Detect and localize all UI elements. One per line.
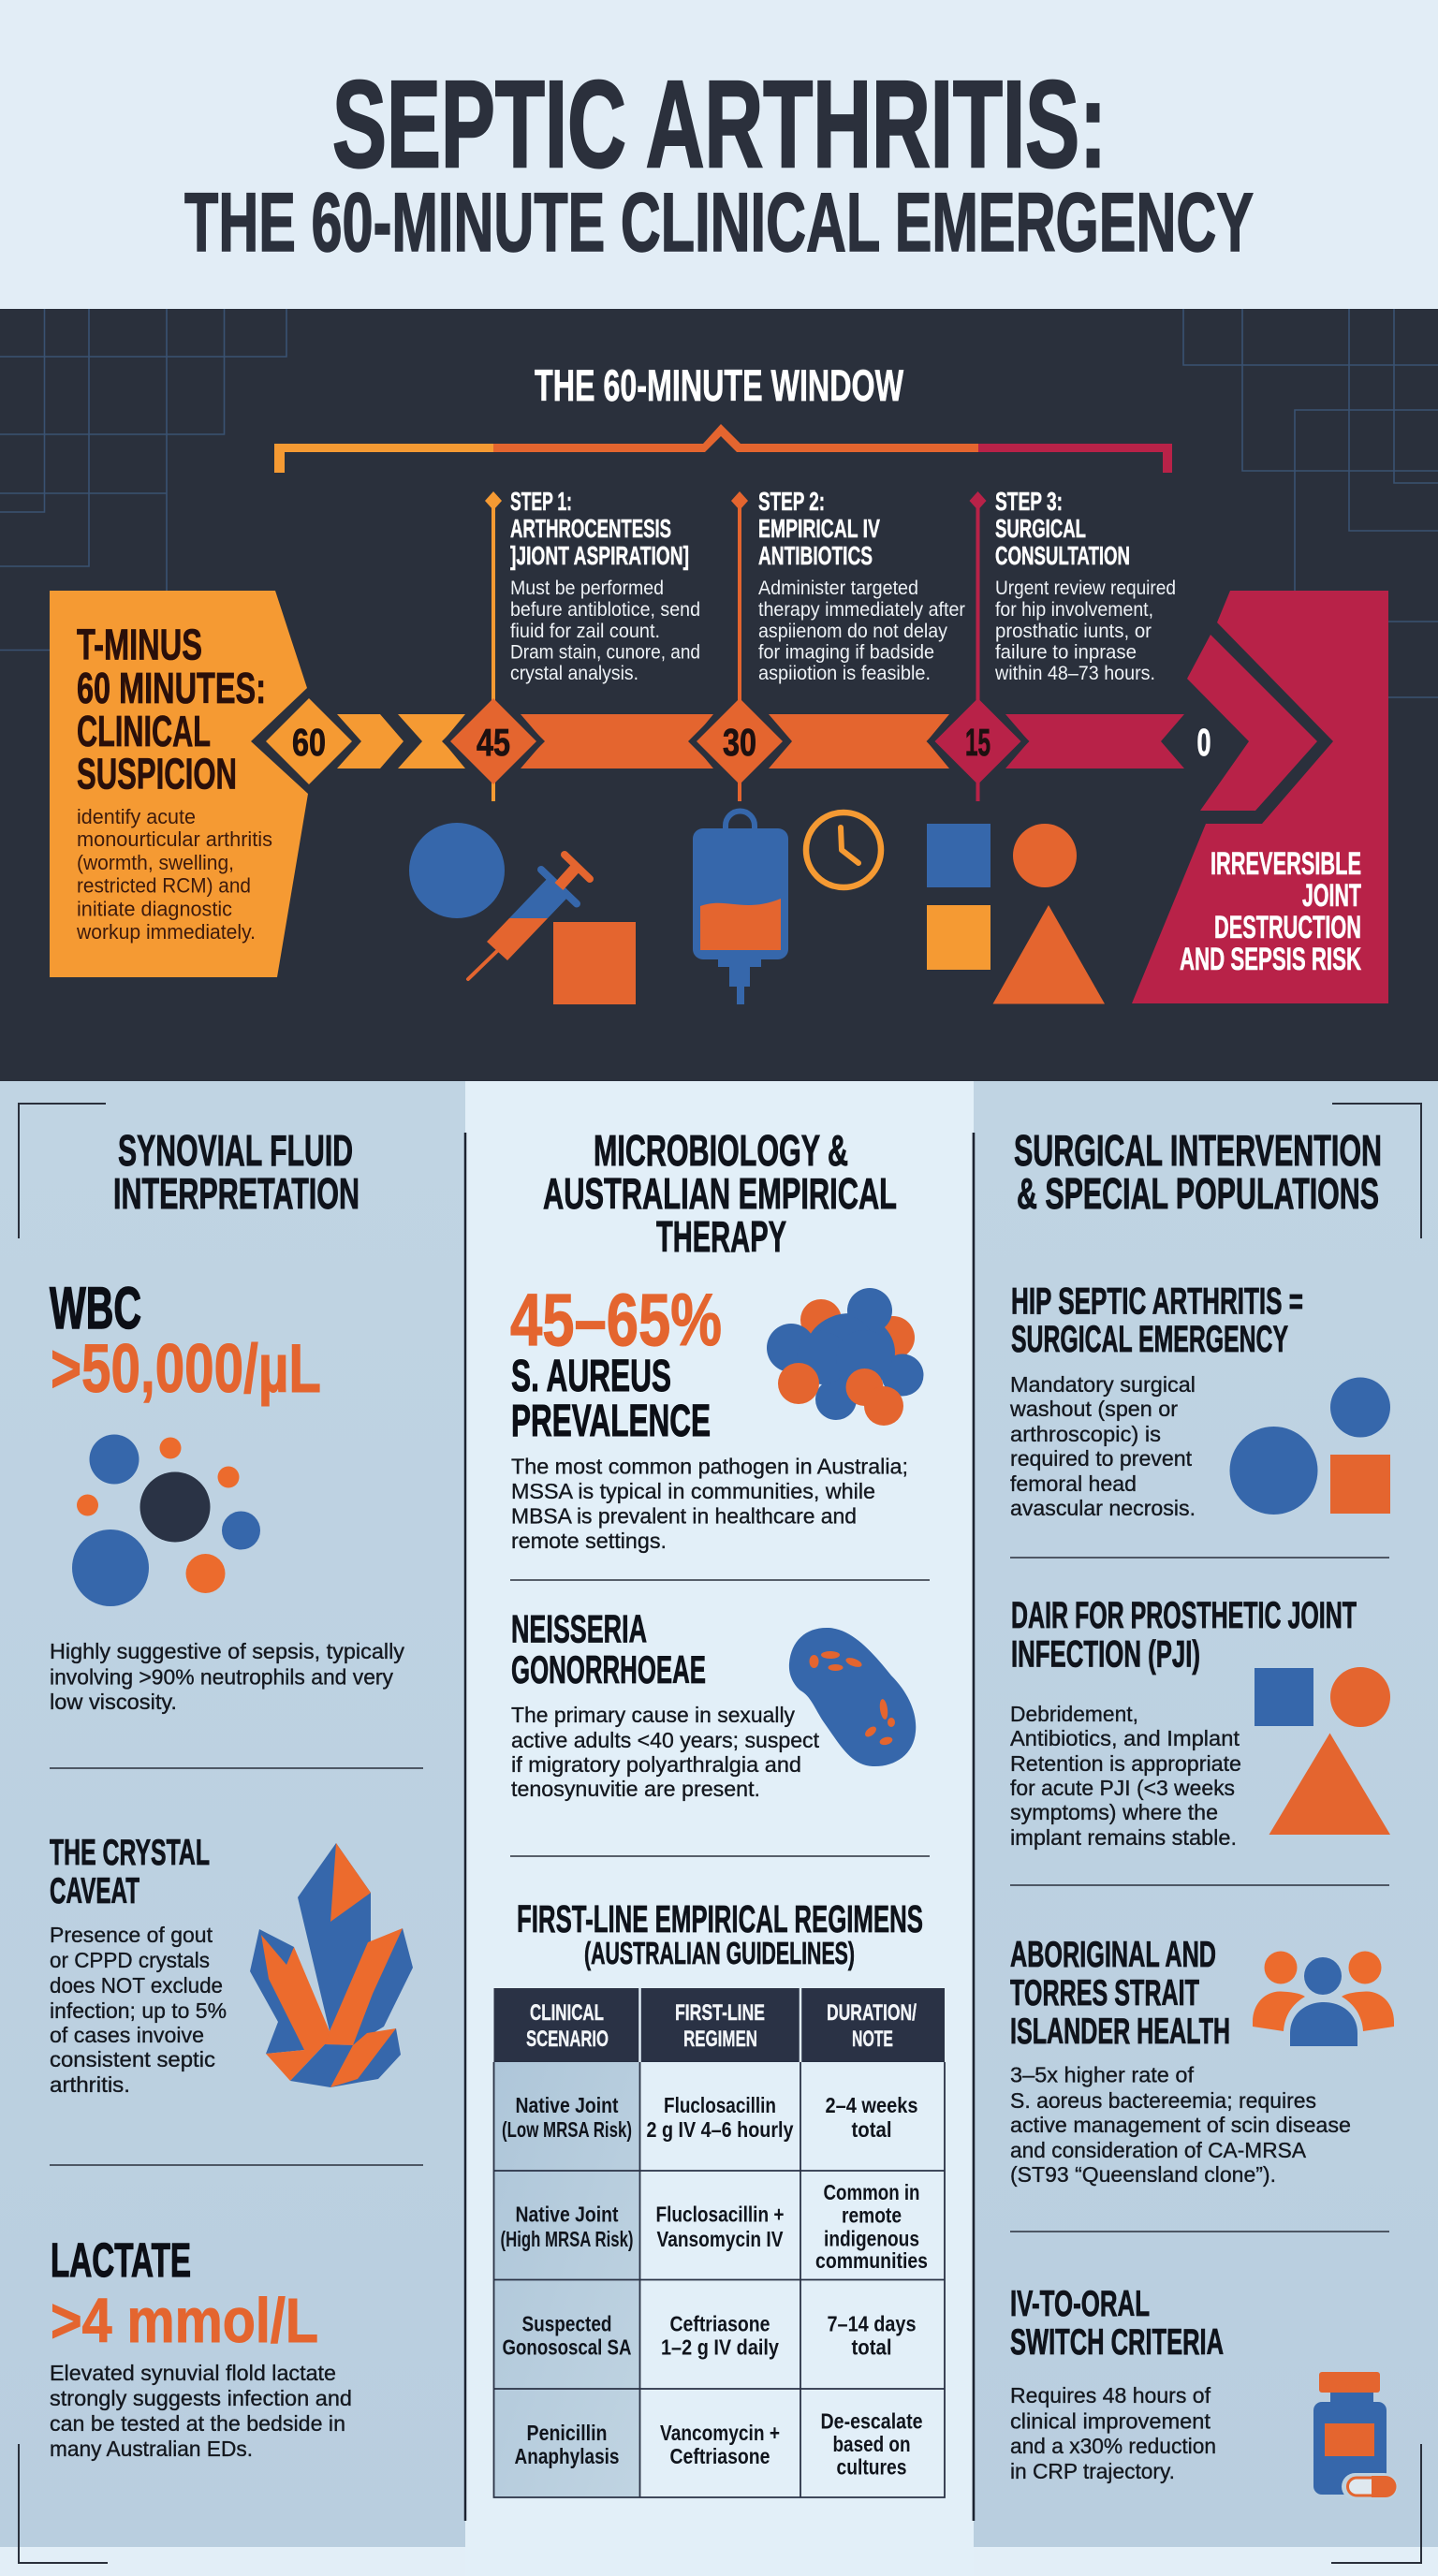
- block heading: Aboriginal and Torres Strait Islander health: TORRES STRAIT: [1010, 1973, 1199, 2013]
- step 3 marker 15 with stem: [927, 491, 1030, 801]
- table row: suspected gonococcal: Suspected: [522, 2312, 612, 2336]
- text: lactate description: many Australian EDs.: [50, 2437, 253, 2461]
- stat: lactate: [51, 2233, 318, 2356]
- table header row: DURATION/: [827, 2000, 917, 2026]
- stat: S. aureus prevalence: [510, 1278, 722, 1446]
- table header row: [526, 2000, 917, 2052]
- table row: suspected gonococcal: [502, 2312, 916, 2359]
- table row: suspected gonococcal: Ceftriasone: [670, 2312, 770, 2336]
- table row: native joint high MRSA risk: (High MRSA Risk): [500, 2227, 633, 2251]
- table row: penicillin anaphylaxis: Penicillin: [526, 2421, 607, 2445]
- text: Aboriginal health description: (ST93 “Queensland clone”).: [1010, 2162, 1276, 2187]
- text: Aboriginal health description: S. aoreus bactereemia; requires: [1010, 2088, 1316, 2113]
- table row: suspected gonococcal: total: [852, 2334, 891, 2359]
- step 3 text: SURGICAL: [995, 514, 1086, 543]
- block heading: first-line empirical regimens: (AUSTRALIAN GUIDELINES): [584, 1936, 855, 1970]
- end panel: irreversible joint destruction: [1132, 591, 1388, 1003]
- text: Aboriginal health description: active management of scin disease: [1010, 2113, 1351, 2137]
- table row: native joint high MRSA risk: indigenous: [824, 2226, 919, 2250]
- text: crystal caveat: consistent septic: [50, 2047, 215, 2071]
- column heading: [1014, 1126, 1382, 1218]
- column heading: THERAPY: [656, 1212, 786, 1261]
- table row: suspected gonococcal: 1–2 g IV daily: [661, 2334, 779, 2359]
- table header row: CLINICAL: [530, 2000, 604, 2026]
- text: DAIR description: Retention is appropriate: [1010, 1751, 1241, 1776]
- end panel: irreversible joint destruction: JOINT: [1302, 878, 1361, 914]
- text: gonorrhoeae description: tenosynuvitie are present.: [511, 1777, 760, 1801]
- step 1 marker 45 with stem: [442, 491, 545, 801]
- panel: synovial fluid interpretation: [0, 1081, 465, 2563]
- step 2 text: therapy immediately after: [758, 599, 965, 621]
- text: IV-to-oral description: Requires 48 hours of: [1010, 2383, 1211, 2408]
- stat: WBC: [50, 1276, 321, 1407]
- icon: people: [1253, 1951, 1394, 2046]
- step 1 text: [510, 487, 700, 684]
- start panel: T-minus 60 minutes: CLINICAL: [77, 707, 211, 755]
- step 1 text: Dram stain, cunore, and: [510, 642, 700, 663]
- start panel: T-minus 60 minutes: monourticular arthritis: [77, 827, 272, 851]
- step 1 text: crystal analysis.: [510, 663, 638, 684]
- column heading: SYNOVIAL FLUID: [118, 1126, 353, 1175]
- table row: native joint high MRSA risk: Common in: [824, 2180, 919, 2204]
- table row: native joint low MRSA risk: 2 g IV 4–6 hourly: [646, 2117, 794, 2142]
- table row: penicillin anaphylaxis: based on: [833, 2432, 910, 2456]
- block heading: the crystal caveat: CAVEAT: [50, 1871, 139, 1911]
- step 2 text: for imaging if badside: [758, 642, 934, 663]
- step 1 text: ]JIONT ASPIRATION]: [510, 541, 689, 570]
- column heading: [543, 1126, 897, 1261]
- stat: S. aureus prevalence: PREVALENCE: [511, 1397, 711, 1446]
- table row: penicillin anaphylaxis: Vancomycin +: [660, 2421, 780, 2445]
- icon: staphylococcus cluster: [767, 1288, 923, 1426]
- text: IV-to-oral description: clinical improvement: [1010, 2409, 1211, 2434]
- block heading: the crystal caveat: [50, 1833, 210, 1911]
- text: hip description: avascular necrosis.: [1010, 1496, 1196, 1520]
- text: DAIR description: Antibiotics, and Implant: [1010, 1726, 1240, 1750]
- text: crystal caveat: does NOT exclude: [50, 1973, 223, 1998]
- step 3 text: Urgent review required: [995, 578, 1176, 599]
- block heading: Neisseria gonorrhoeae: NEISSERIA: [511, 1606, 647, 1651]
- start panel: T-minus 60 minutes: (wormth, swelling,: [77, 851, 234, 874]
- step 2 text: aspiienom do not delay: [758, 621, 947, 642]
- table row: penicillin anaphylaxis: Ceftriasone: [670, 2444, 770, 2468]
- text: hip description: arthroscopic) is: [1010, 1422, 1161, 1446]
- table row: native joint high MRSA risk: [500, 2180, 928, 2273]
- table row: native joint high MRSA risk: Fluclosacillin +: [655, 2202, 785, 2226]
- stat: WBC: >50,000/µL: [51, 1329, 321, 1407]
- text: DAIR description: symptoms) where the: [1010, 1800, 1218, 1824]
- text: IV-to-oral description: [1010, 2383, 1216, 2483]
- text: hip description: Mandatory surgical: [1010, 1372, 1196, 1397]
- step 1 text: fiuid for zail count.: [510, 621, 660, 642]
- block heading: Aboriginal and Torres Strait Islander health: ISLANDER HEALTH: [1010, 2012, 1230, 2052]
- table row: native joint low MRSA risk: [502, 2093, 917, 2142]
- table row: native joint low MRSA risk: Fluclosacillin: [664, 2093, 776, 2117]
- table row: native joint high MRSA risk: Native Joint: [515, 2202, 619, 2226]
- table row: native joint low MRSA risk: total: [852, 2117, 891, 2142]
- text: crystal caveat: arthritis.: [50, 2072, 130, 2097]
- step 3 text: for hip involvement,: [995, 599, 1153, 621]
- step 2 text: EMPIRICAL IV: [758, 514, 880, 543]
- start panel: T-minus 60 minutes: workup immediately.: [76, 920, 256, 944]
- text: crystal caveat: of cases invoive: [50, 2023, 204, 2047]
- panel: surgical intervention and special populations: [974, 1081, 1438, 2563]
- table row: penicillin anaphylaxis: [515, 2409, 923, 2479]
- column heading: [113, 1126, 360, 1218]
- block heading: Aboriginal and Torres Strait Islander health: [1010, 1935, 1230, 2052]
- text: DAIR description: Debridement,: [1010, 1702, 1138, 1726]
- step 3 text: within 48–73 hours.: [994, 663, 1155, 684]
- step 1 text: ARTHROCENTESIS: [510, 514, 671, 543]
- step 2 marker 30 with stem: [688, 491, 791, 801]
- step 2 text: aspiiotion is feasible.: [758, 663, 931, 684]
- text: WBC description: involving >90% neutrophils and very: [50, 1664, 393, 1689]
- table header row: SCENARIO: [526, 2027, 609, 2052]
- table header row: REGIMEN: [683, 2027, 757, 2052]
- icon: orange square: [553, 922, 636, 1004]
- icon: blue circle: [409, 823, 505, 918]
- column heading: AUSTRALIAN EMPIRICAL: [543, 1169, 897, 1218]
- panel: microbiology and empirical therapy: [465, 1081, 974, 2576]
- text: hip description: required to prevent: [1010, 1446, 1193, 1471]
- text: lactate description: strongly suggests infection and: [50, 2386, 352, 2410]
- panel: 60-minute window timeline: [0, 309, 1438, 1081]
- block heading: the crystal caveat: THE CRYSTAL: [50, 1833, 210, 1873]
- column heading: MICROBIOLOGY &: [594, 1126, 848, 1175]
- block heading: first-line empirical regimens: FIRST-LINE EMPIRICAL REGIMENS: [517, 1897, 923, 1940]
- start panel: T-minus 60 minutes: [50, 591, 308, 977]
- text: lactate description: [50, 2361, 352, 2461]
- table header row: NOTE: [852, 2027, 893, 2052]
- text: DAIR description: [1010, 1702, 1241, 1850]
- text: S. aureus description: remote settings.: [511, 1529, 667, 1553]
- step 1 text: Must be performed: [510, 578, 664, 599]
- icon: DAIR shapes: [1255, 1667, 1390, 1835]
- table row: penicillin anaphylaxis: De-escalate: [820, 2409, 923, 2434]
- block heading: IV-to-oral switch criteria: [1010, 2284, 1224, 2363]
- block heading: first-line empirical regimens: [517, 1897, 923, 1970]
- text: hip description: washout (spen or: [1009, 1397, 1178, 1421]
- start panel: T-minus 60 minutes: 60 MINUTES:: [77, 664, 266, 712]
- stat: lactate: LACTATE: [51, 2233, 191, 2287]
- end panel: irreversible joint destruction: DESTRUCTION: [1214, 910, 1361, 945]
- table row: suspected gonococcal: 7–14 days: [828, 2312, 916, 2336]
- text: DAIR description: implant remains stable.: [1010, 1825, 1237, 1850]
- timeline marker 60: 60: [292, 721, 326, 764]
- table row: native joint high MRSA risk: Vansomycin IV: [657, 2227, 784, 2251]
- start panel: T-minus 60 minutes: SUSPICION: [77, 749, 237, 798]
- column heading: INTERPRETATION: [113, 1169, 360, 1218]
- block heading: DAIR: [1011, 1595, 1357, 1676]
- table row: native joint low MRSA risk: 2–4 weeks: [826, 2093, 917, 2117]
- text: crystal caveat: Presence of gout: [50, 1923, 213, 1947]
- step 3 marker 15 with stem: 15: [965, 721, 990, 764]
- table row: native joint high MRSA risk: communities: [815, 2248, 928, 2273]
- icon: IV bag: [693, 811, 788, 1004]
- block heading: IV-to-oral switch criteria: SWITCH CRITERIA: [1010, 2322, 1224, 2363]
- title block: [0, 0, 1438, 309]
- icon: cell cluster: [72, 1434, 260, 1606]
- table: first-line regimens: [494, 1988, 945, 2497]
- icon: hip shapes: [1230, 1378, 1390, 1515]
- step 1 text: STEP 1:: [510, 487, 572, 516]
- start panel: T-minus 60 minutes: T-MINUS: [77, 620, 202, 668]
- table row: native joint low MRSA risk: (Low MRSA Risk): [502, 2117, 632, 2142]
- icon: syringe: [468, 855, 590, 979]
- text: WBC description: [50, 1639, 405, 1714]
- text: crystal caveat: [50, 1923, 227, 2097]
- step 2 text: STEP 2:: [758, 487, 825, 516]
- table row: penicillin anaphylaxis: Anaphylasis: [515, 2444, 620, 2468]
- text: hip description: femoral head: [1010, 1471, 1137, 1496]
- text: gonorrhoeae description: if migratory polyarthralgia and: [511, 1752, 801, 1777]
- stat: WBC: WBC: [50, 1276, 141, 1341]
- text: hip description: [1009, 1372, 1196, 1520]
- step 3 text: CONSULTATION: [995, 541, 1130, 570]
- text: S. aureus description: The most common pathogen in Australia;: [511, 1455, 908, 1479]
- text: DAIR description: for acute PJI (<3 weeks: [1010, 1776, 1235, 1800]
- block heading: hip septic arthritis: [1011, 1281, 1303, 1360]
- text: lactate description: Elevated synuvial flold lactate: [50, 2361, 336, 2385]
- table header row: FIRST-LINE: [675, 2000, 765, 2026]
- block heading: DAIR: INFECTION (PJI): [1011, 1634, 1200, 1676]
- table row: native joint low MRSA risk: Native Joint: [515, 2093, 619, 2117]
- step 2 text: [758, 487, 965, 684]
- text: S. aureus description: MBSA is prevalent in healthcare and: [511, 1503, 857, 1528]
- text: WBC description: low viscosity.: [50, 1690, 177, 1714]
- block heading: Neisseria gonorrhoeae: GONORRHOEAE: [511, 1647, 706, 1691]
- step 1 marker 45 with stem: 45: [477, 721, 510, 764]
- timeline band segments: [337, 714, 1184, 768]
- step 3 text: prosthatic iunts, or: [995, 621, 1152, 642]
- stat: lactate: >4 mmol/L: [51, 2286, 318, 2356]
- text: WBC description: Highly suggestive of sepsis, typically: [50, 1639, 405, 1663]
- text: Aboriginal health description: [1010, 2063, 1351, 2187]
- block heading: Aboriginal and Torres Strait Islander health: ABORIGINAL AND: [1010, 1935, 1216, 1975]
- stat: S. aureus prevalence: 45–65%: [510, 1278, 722, 1361]
- step 1 text: befure antiblotice, send: [510, 599, 700, 621]
- text: gonorrhoeae description: [511, 1703, 820, 1801]
- icon: crystal: [250, 1843, 413, 2087]
- step 3 text: failure to inprase: [995, 642, 1137, 663]
- icon: diplococci cell: [789, 1628, 916, 1766]
- icon: clock: [806, 812, 881, 887]
- text: gonorrhoeae description: The primary cause in sexually: [511, 1703, 795, 1727]
- timeline marker 0: 0: [1196, 721, 1211, 764]
- table row: suspected gonococcal: Gonososcal SA: [502, 2334, 631, 2359]
- text: IV-to-oral description: in CRP trajectory.: [1010, 2459, 1175, 2483]
- start panel: T-minus 60 minutes: restricted RCM) and: [77, 874, 251, 897]
- table row: penicillin anaphylaxis: cultures: [837, 2454, 906, 2479]
- timeline marker 60: [257, 690, 360, 793]
- step 2 text: ANTIBIOTICS: [758, 541, 873, 570]
- text: S. aureus description: MSSA is typical in communities, while: [511, 1479, 875, 1503]
- section heading: the 60-minute window: THE 60-MINUTE WINDOW: [535, 360, 903, 410]
- start panel: T-minus 60 minutes: identify acute: [77, 805, 196, 828]
- text: gonorrhoeae description: active adults <40 years; suspect: [511, 1728, 820, 1752]
- step 3 text: [994, 487, 1176, 684]
- table row: native joint high MRSA risk: remote: [842, 2203, 902, 2228]
- text: IV-to-oral description: and a x30% reduction: [1010, 2434, 1216, 2458]
- start panel: T-minus 60 minutes: initiate diagnostic: [77, 897, 232, 921]
- step 3 text: STEP 3:: [995, 487, 1063, 516]
- step 2 text: Administer targeted: [758, 578, 918, 599]
- icon: shape group: [927, 824, 1105, 1003]
- text: crystal caveat: or CPPD crystals: [50, 1948, 210, 1972]
- text: Aboriginal health description: and consideration of CA-MRSA: [1010, 2138, 1307, 2162]
- text: Aboriginal health description: 3–5x higher rate of: [1010, 2063, 1195, 2087]
- block heading: Neisseria gonorrhoeae: [511, 1606, 706, 1691]
- text: crystal caveat: infection; up to 5%: [50, 1998, 227, 2023]
- icon: pill bottle: [1313, 2372, 1398, 2500]
- text: S. aureus description: [511, 1455, 908, 1553]
- block heading: IV-to-oral switch criteria: IV-TO-ORAL: [1010, 2284, 1150, 2324]
- text: lactate description: can be tested at the bedside in: [50, 2411, 345, 2436]
- stat: S. aureus prevalence: S. AUREUS: [511, 1352, 671, 1401]
- step 2 marker 30 with stem: 30: [723, 721, 756, 764]
- timeline bracket: [274, 424, 1172, 473]
